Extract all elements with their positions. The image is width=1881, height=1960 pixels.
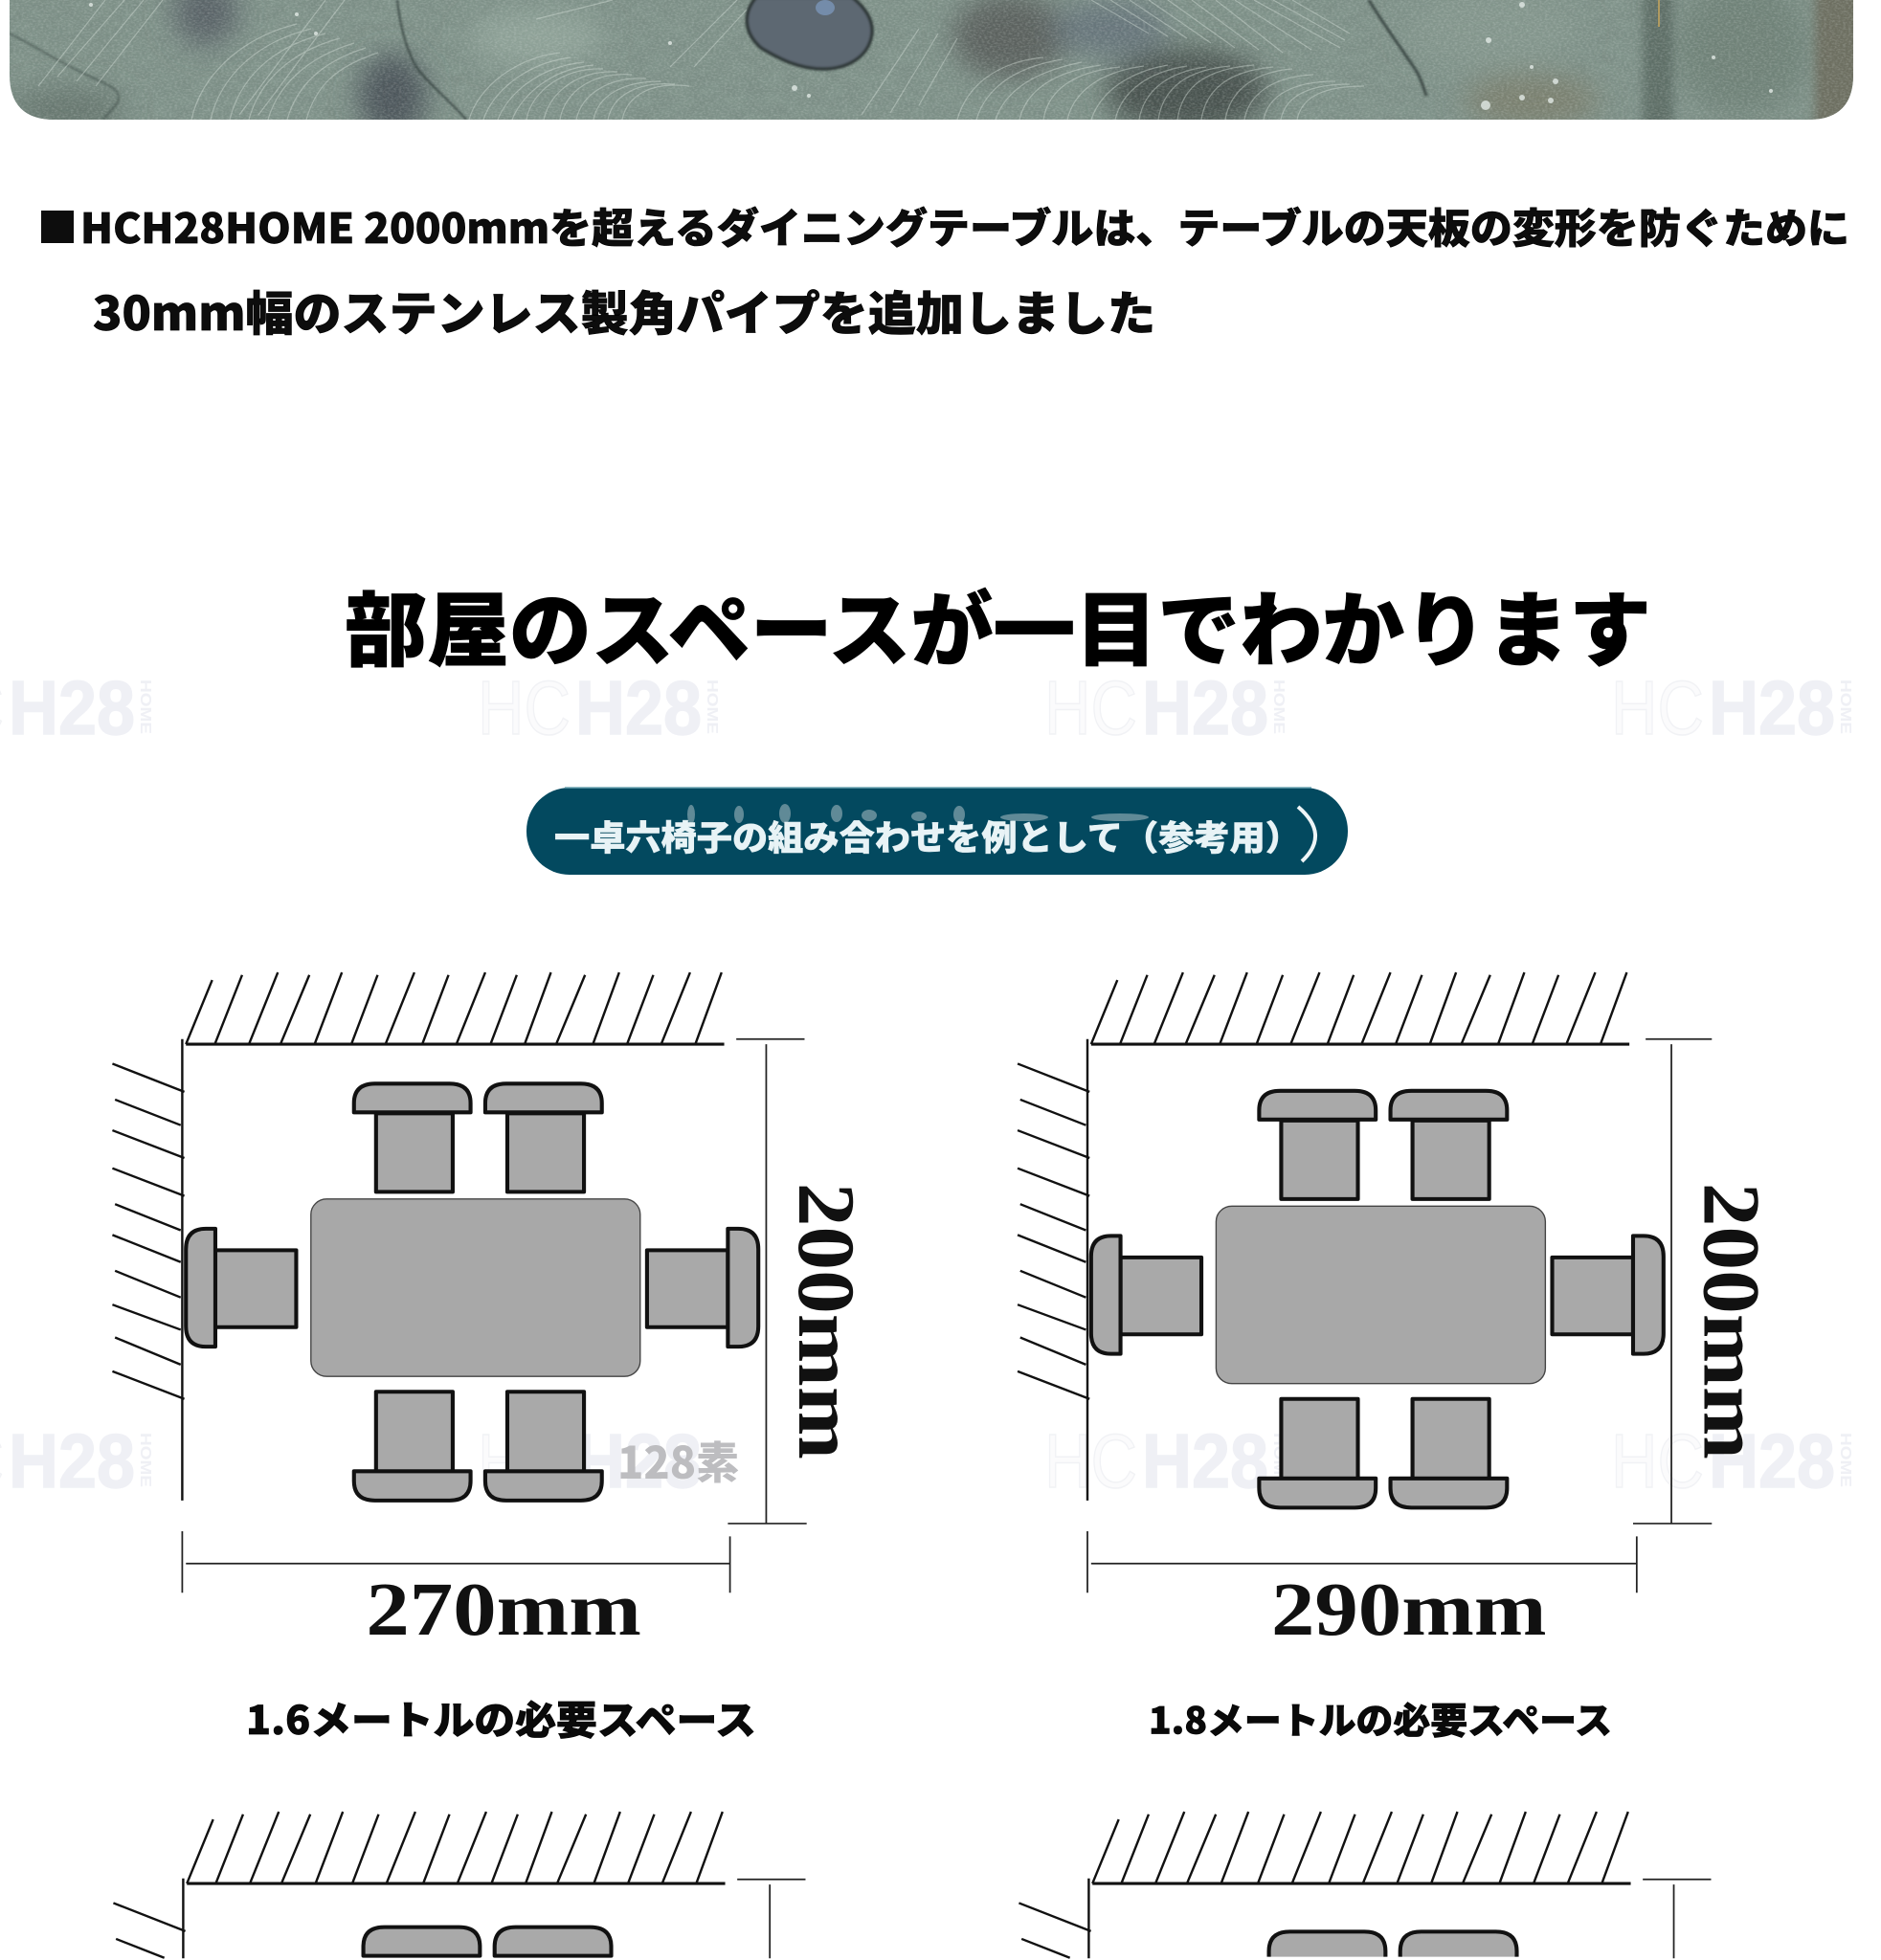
height dimension: [737, 1880, 805, 1958]
watermarks row 1: H28: [9, 665, 135, 750]
diagram: 1.8m table: [1018, 972, 1776, 1652]
watermarks row 2: HC: [1044, 1418, 1137, 1503]
watermarks row 1: HOME: [1270, 679, 1287, 734]
watermarks row 1: HOME: [137, 679, 153, 734]
walls: [1019, 1812, 1631, 1958]
watermarks row 1: HOME: [704, 679, 720, 734]
width dimension: [182, 1531, 730, 1652]
watermarks row 2: HC: [1611, 1418, 1704, 1503]
height dimension: 200mm: [781, 1183, 871, 1459]
caption 1.6m: 1.6メートルの必要スペース: [246, 1688, 756, 1746]
height dimension: [728, 1039, 871, 1524]
diagram: fourth layout (cropped): [1019, 1812, 1711, 1958]
caption 1.8m: 1.8メートルの必要スペース: [1149, 1691, 1612, 1744]
height dimension: [1633, 1039, 1776, 1524]
width dimension: 290mm: [1271, 1568, 1546, 1652]
marble table photo: [10, 0, 1853, 120]
description line 1: HCH28HOME 2000mmを超えるダイニングテーブルは、テーブルの天板の変形を防ぐために: [80, 196, 1849, 256]
diagram: third layout (cropped): [113, 1812, 805, 1958]
watermarks row 2: H28: [575, 1418, 702, 1503]
walls: [1018, 972, 1629, 1501]
watermarks row 1: H28: [1142, 665, 1268, 750]
watermarks row 1: H28: [1709, 665, 1835, 750]
watermarks row 1: HC: [478, 665, 571, 750]
chairs: [186, 1083, 758, 1501]
dark oval inclusion: [747, 0, 872, 69]
watermarks row 1: H28: [575, 665, 702, 750]
chairs: [1269, 1931, 1517, 1957]
watermarks row 2: HC: [478, 1418, 571, 1503]
walls: [113, 1812, 726, 1958]
banner noise decoration: [687, 804, 1149, 824]
chairs: [1091, 1091, 1664, 1507]
section heading: 部屋のスペースが一目でわかります: [345, 566, 1651, 683]
grey overlay mark: 128素: [617, 1429, 739, 1492]
watermarks row 1: [0, 665, 1853, 750]
watermarks row 2: H28: [1142, 1418, 1268, 1503]
height dimension: [1643, 1880, 1711, 1958]
watermarks row 1: HC: [1611, 665, 1704, 750]
banner text: 一卓六椅子の組み合わせを例として（参考用）: [554, 811, 1301, 860]
description text: [41, 196, 1849, 345]
chairs: [364, 1927, 612, 1956]
watermarks row 1: HC: [1044, 665, 1137, 750]
watermarks row 1: HOME: [1837, 679, 1853, 734]
height dimension: 200mm: [1686, 1183, 1776, 1459]
example pill banner: [526, 788, 1348, 875]
watermarks row 2: H28: [1709, 1418, 1835, 1503]
watermarks row 2: HOME: [137, 1433, 153, 1487]
width dimension: 270mm: [366, 1568, 641, 1652]
walls: [112, 972, 725, 1501]
watermarks row 2: [0, 1418, 1853, 1503]
table: [1216, 1206, 1545, 1384]
diagram: 1.6m table: [112, 972, 871, 1652]
watermarks row 2: HOME: [1837, 1433, 1853, 1487]
watermarks row 2: HOME: [1270, 1433, 1287, 1487]
watermarks row 2: H28: [9, 1418, 135, 1503]
square bullet: [41, 211, 74, 243]
table: [311, 1199, 640, 1376]
banner arc: [1298, 807, 1315, 861]
width dimension: [1087, 1531, 1637, 1652]
description line 2: 30mm幅のステンレス製角パイプを追加しました: [93, 277, 1155, 345]
